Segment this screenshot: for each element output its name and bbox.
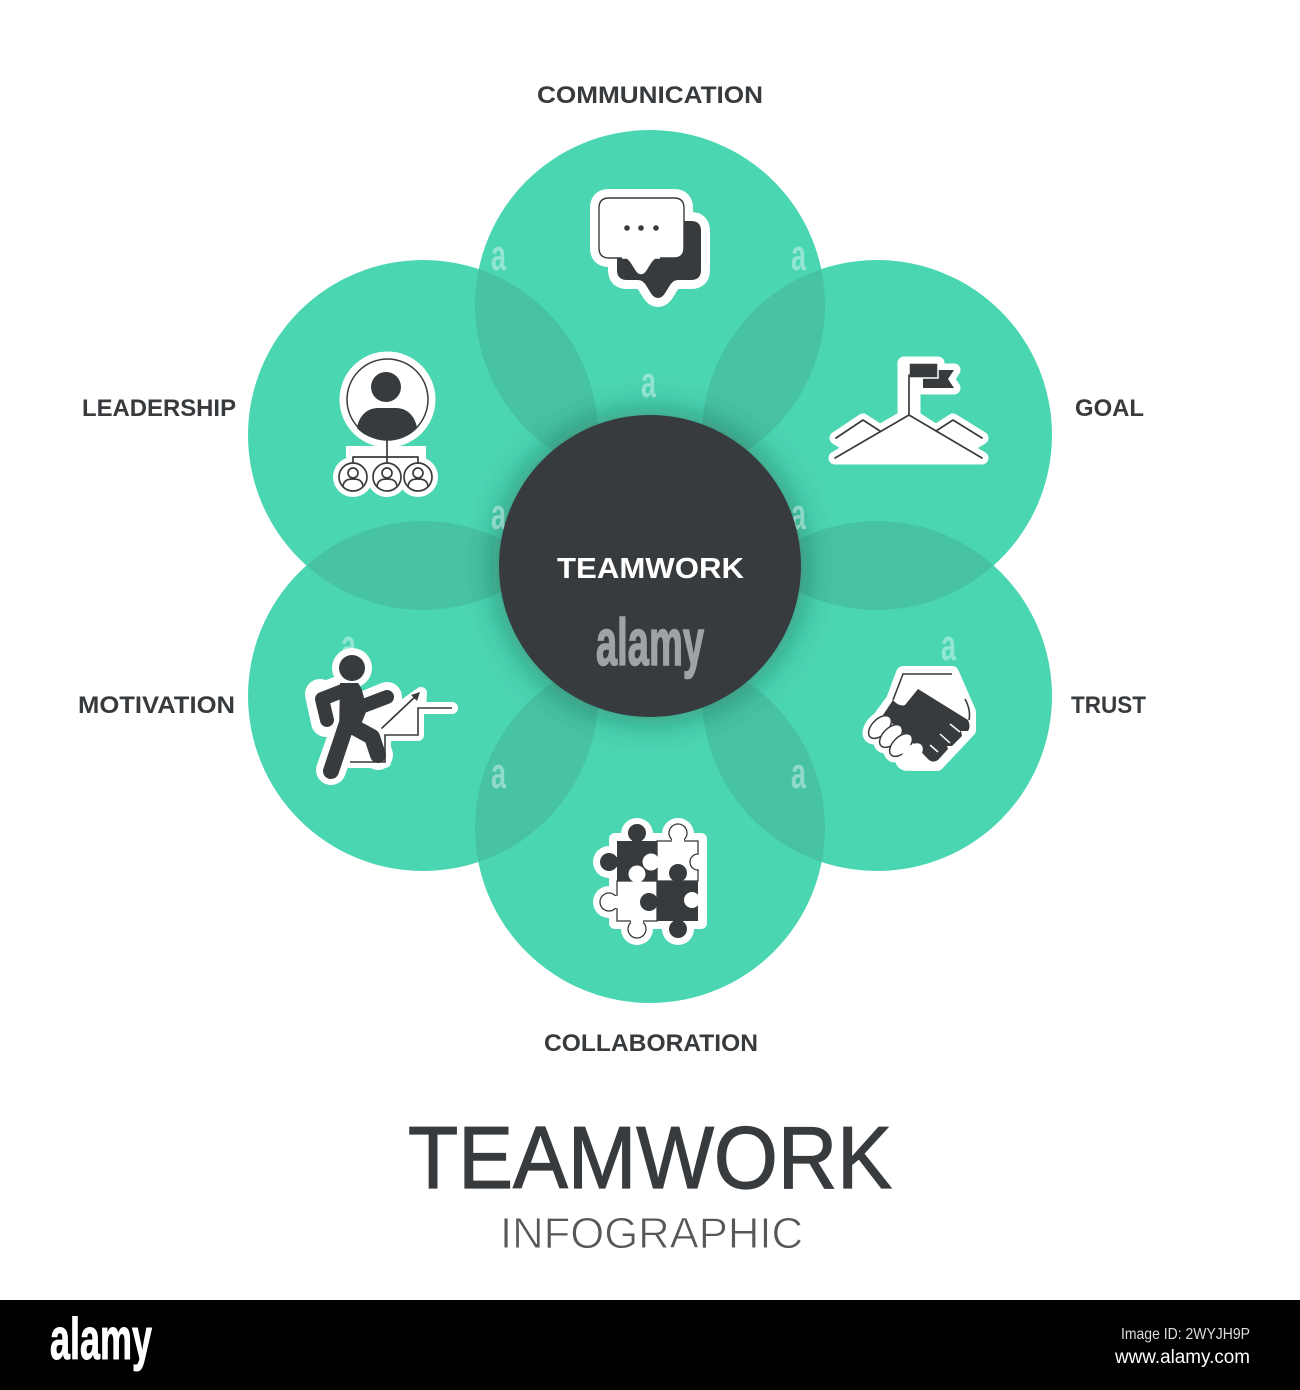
watermark letters: a xyxy=(491,490,506,539)
footer bar xyxy=(0,1300,1300,1390)
petal: trust xyxy=(702,521,1052,871)
title: TEAMWORK xyxy=(408,1108,892,1207)
label: collaboration: COLLABORATION xyxy=(544,1030,758,1057)
watermark letters: a xyxy=(491,231,506,280)
icon: person climbing stairs xyxy=(320,648,452,771)
watermark letters: a xyxy=(641,358,656,407)
petal: goal xyxy=(702,260,1052,610)
runner body xyxy=(322,690,387,720)
footer logo: alamy xyxy=(50,1307,152,1372)
label: leadership: LEADERSHIP xyxy=(82,395,236,422)
label: trust: TRUST xyxy=(1071,692,1146,719)
label: motivation: MOTIVATION xyxy=(78,692,235,719)
puzzle outlined pieces xyxy=(600,824,698,938)
petal overlaps xyxy=(306,250,994,891)
petal: motivation xyxy=(248,521,598,871)
icon: puzzle pieces xyxy=(593,818,707,945)
runner head xyxy=(339,655,365,681)
petal: collaboration xyxy=(475,653,825,1003)
watermark letters xyxy=(341,231,956,798)
puzzle dark pieces xyxy=(600,824,698,938)
watermark letters: a xyxy=(791,749,806,798)
watermark letters: a xyxy=(941,621,956,670)
image id: Image ID: 2WYJH9P xyxy=(1121,1326,1250,1343)
center watermark: alamy xyxy=(596,605,704,679)
label: communication: COMMUNICATION xyxy=(537,82,763,109)
watermark letters: a xyxy=(491,749,506,798)
center label: TEAMWORK xyxy=(557,553,744,585)
icon: leadership organization xyxy=(333,352,438,497)
petal: leadership xyxy=(248,260,598,610)
watermark letters: a xyxy=(341,621,356,670)
label: goal: GOAL xyxy=(1075,395,1144,422)
icon: mountain with flag xyxy=(835,363,982,458)
icon: handshake xyxy=(864,673,970,769)
watermark letters: a xyxy=(791,490,806,539)
website: www.alamy.com xyxy=(1114,1347,1250,1368)
watermark letters: a xyxy=(791,231,806,280)
icon: speech bubbles xyxy=(599,198,701,298)
center circle xyxy=(499,415,801,717)
petal: communication xyxy=(475,130,825,480)
subtitle: INFOGRAPHIC xyxy=(500,1209,803,1258)
center shadow xyxy=(493,409,807,723)
petal diagram xyxy=(248,130,1052,1003)
